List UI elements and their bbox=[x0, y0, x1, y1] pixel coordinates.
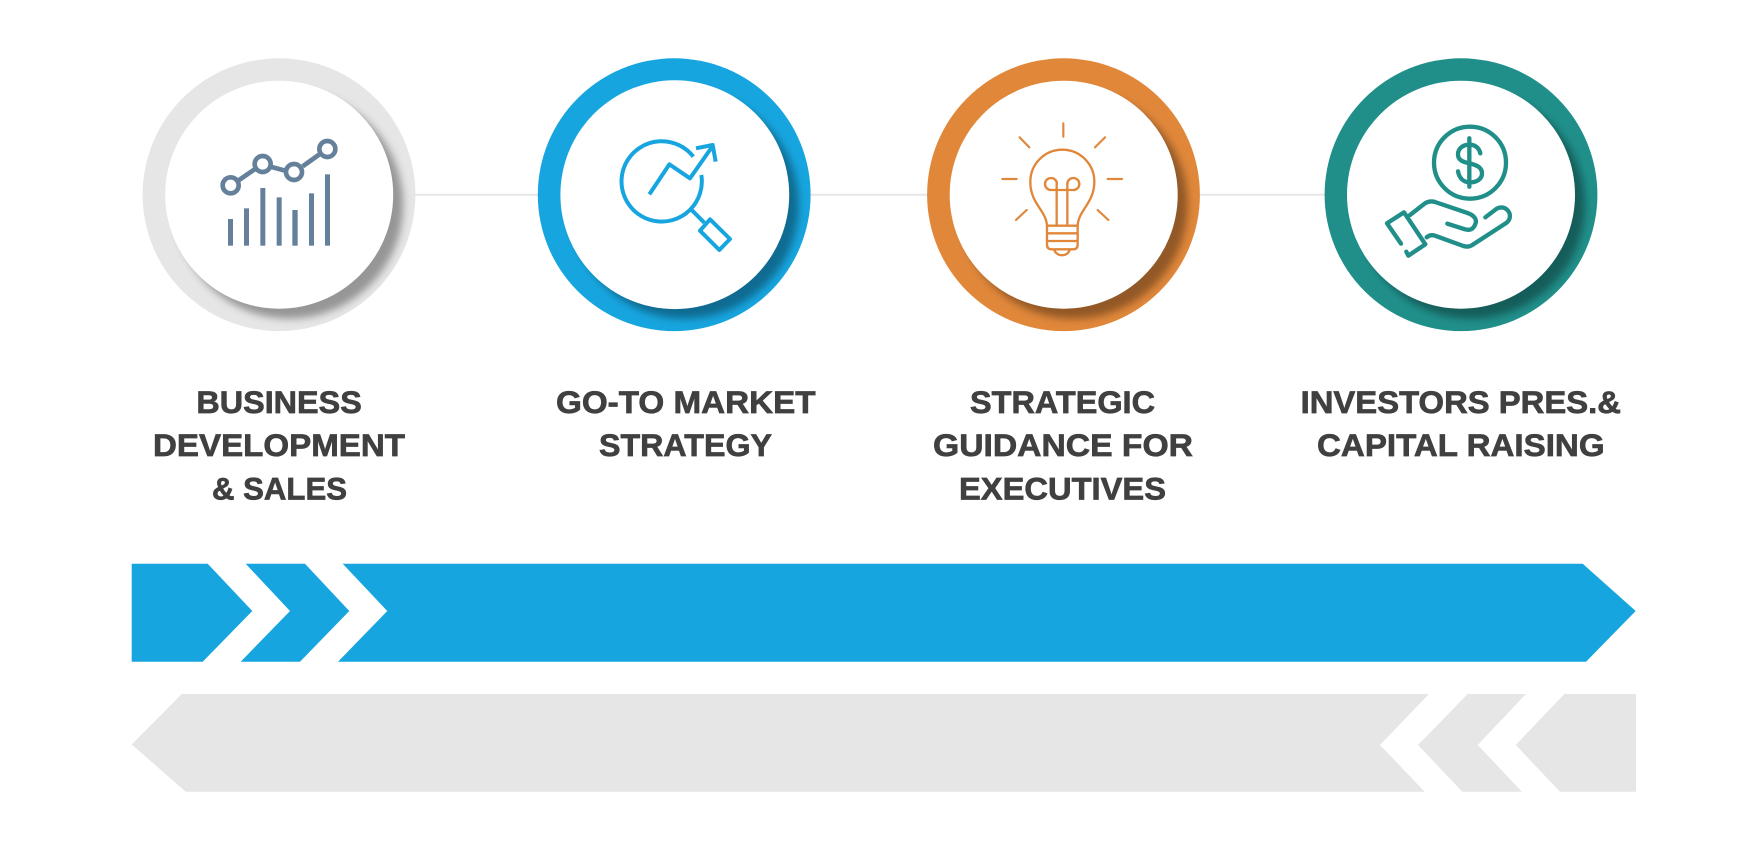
heading: business development and sales: BUSINESS bbox=[196, 384, 362, 420]
icon: light bulb bbox=[1002, 123, 1122, 255]
connector lines bbox=[414, 194, 1326, 196]
icon: magnifier with growth arrow bbox=[622, 141, 730, 250]
ring: grey bbox=[143, 58, 415, 331]
panel: go-to market strategy bbox=[538, 58, 816, 463]
ring: teal bbox=[1325, 58, 1597, 331]
heading: strategic guidance for executives: STRATEGIC bbox=[970, 384, 1155, 420]
ring shadow bbox=[175, 91, 403, 319]
panel: strategic guidance for executives bbox=[927, 58, 1200, 507]
arrow: grey, pointing left bbox=[132, 694, 1636, 792]
ring: orange bbox=[927, 58, 1200, 331]
inner white disc bbox=[1347, 81, 1575, 309]
heading: go-to market strategy: STRATEGY bbox=[599, 427, 772, 463]
heading: investors presentation and capital raising bbox=[1301, 384, 1621, 463]
heading: investors presentation and capital raising: INVESTORS PRES.& bbox=[1301, 384, 1621, 420]
icon: bar chart with trend line bbox=[223, 141, 335, 246]
infographic canvas bbox=[132, 58, 1636, 792]
heading: business development and sales: DEVELOPMENT bbox=[153, 427, 405, 463]
icon: hand holding coin bbox=[1387, 127, 1510, 256]
arrow: blue, pointing right bbox=[132, 564, 1636, 662]
heading: business development and sales: & SALES bbox=[212, 470, 347, 506]
ring shadow bbox=[1357, 91, 1585, 319]
heading: strategic guidance for executives: GUIDANCE FOR bbox=[933, 427, 1193, 463]
ring shadow bbox=[960, 91, 1188, 319]
heading: strategic guidance for executives bbox=[933, 384, 1193, 506]
inner white disc bbox=[165, 81, 393, 309]
inner white disc bbox=[560, 80, 789, 309]
panel: business development and sales bbox=[143, 58, 415, 507]
heading: go-to market strategy: GO-TO MARKET bbox=[556, 384, 816, 420]
heading: go-to market strategy bbox=[556, 384, 816, 463]
inner white disc bbox=[950, 81, 1178, 309]
panel: investors presentation and capital raising bbox=[1301, 58, 1621, 463]
heading: business development and sales bbox=[153, 384, 405, 506]
heading: investors presentation and capital raising: CAPITAL RAISING bbox=[1317, 427, 1605, 463]
ring: blue bbox=[538, 58, 811, 331]
ring shadow bbox=[571, 91, 799, 319]
heading: strategic guidance for executives: EXECUTIVES bbox=[959, 470, 1166, 506]
